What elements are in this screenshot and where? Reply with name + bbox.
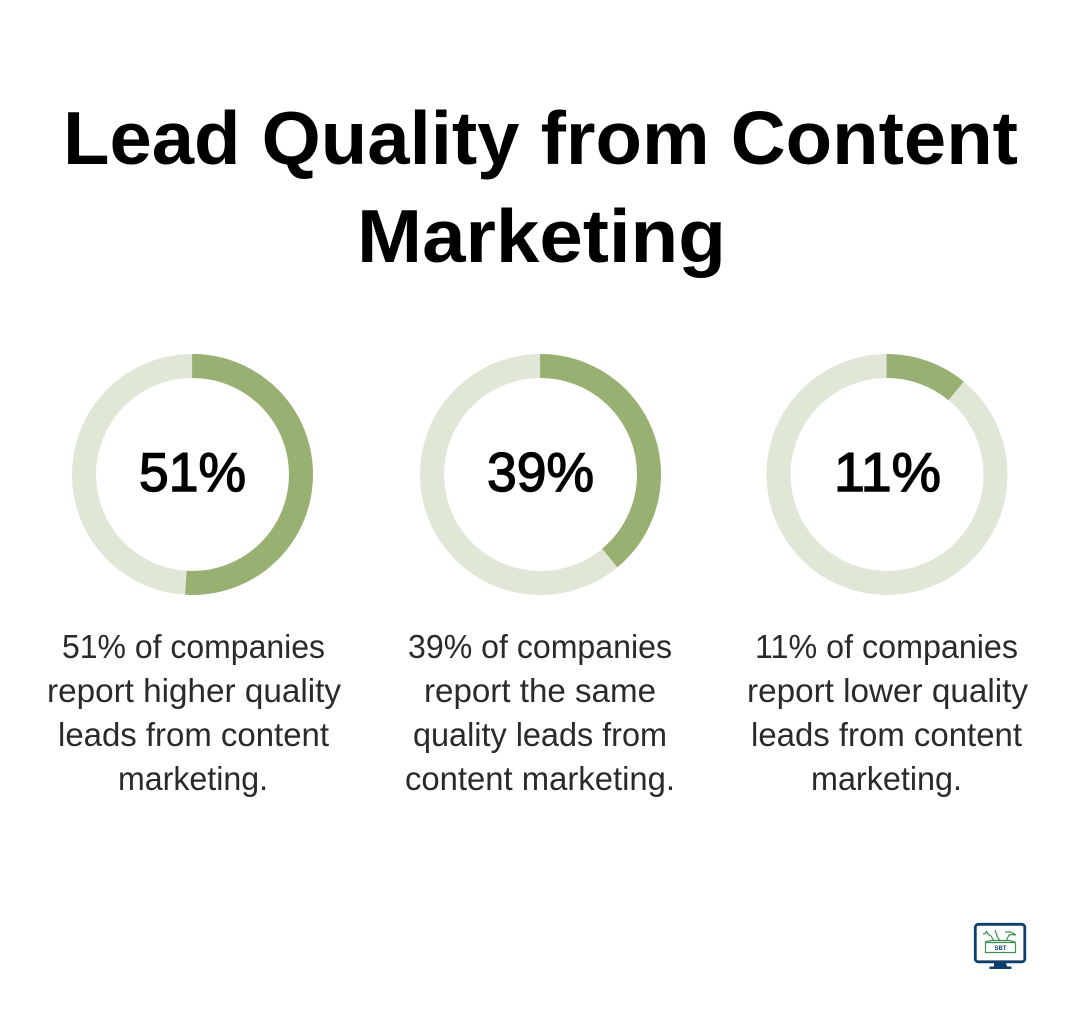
panel: 39% same quality — [405, 366, 675, 797]
description: higher quality: 51% of companies — [62, 628, 325, 665]
icon: monitor with toolbox logo — [975, 924, 1025, 969]
donut chart: 39% — [432, 366, 649, 583]
donut chart: 51% — [84, 366, 301, 583]
panel: 51% higher quality — [47, 366, 341, 797]
panel: 11% lower quality — [747, 366, 1028, 797]
description: same quality: report the same — [424, 672, 656, 709]
donut chart: 11% — [778, 366, 996, 583]
description: lower quality — [747, 628, 1028, 797]
description: same quality: content marketing. — [405, 760, 675, 797]
description: lower quality: report lower quality — [747, 672, 1028, 709]
description: higher quality: report higher quality — [47, 672, 341, 709]
description: lower quality: marketing. — [811, 760, 962, 797]
screwdriver — [995, 930, 1000, 941]
hammer — [1005, 932, 1016, 941]
wrench — [983, 932, 994, 941]
description: lower quality: 11% of companies — [755, 628, 1018, 665]
title — [63, 96, 1018, 278]
title: Marketing — [357, 194, 726, 278]
description: same quality — [405, 628, 675, 797]
description: higher quality: marketing. — [118, 760, 268, 797]
description: higher quality — [47, 628, 341, 797]
description: same quality: quality leads from — [413, 716, 667, 753]
logo text: SBT — [994, 946, 1007, 952]
title: Lead Quality from Content — [63, 96, 1018, 180]
value: 11%: 11% — [834, 441, 941, 503]
value: 39%: 39% — [487, 441, 594, 503]
description: lower quality: leads from content — [751, 716, 1022, 753]
toolbox body — [986, 942, 1016, 952]
description: higher quality: leads from content — [58, 716, 329, 753]
value: 51%: 51% — [139, 441, 246, 503]
description: same quality: 39% of companies — [408, 628, 672, 665]
